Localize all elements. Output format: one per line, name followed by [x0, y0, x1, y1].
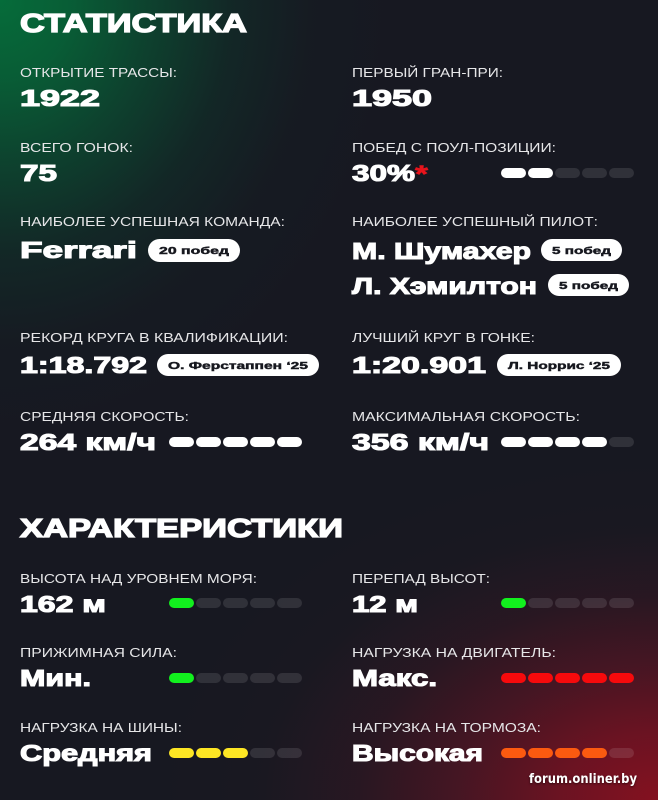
- pill: Hamilton wins: 5 побед: [559, 280, 618, 292]
- stat: wins from pole: 30%: [352, 160, 415, 186]
- characteristic: altitude: [20, 572, 302, 617]
- red asterisk: *: [415, 161, 429, 188]
- characteristic: brake load: [352, 721, 634, 766]
- characteristic: elevation change: ПЕРЕПАД ВЫСОТ:: [352, 572, 490, 586]
- characteristic: downforce: [20, 646, 302, 691]
- characteristic: tyre load: [20, 721, 302, 766]
- stat: best race lap: 1:20.901: [352, 352, 486, 378]
- stat: most successful team: Ferrari: [20, 237, 137, 263]
- heading: characteristics: ХАРАКТЕРИСТИКИ: [20, 513, 343, 543]
- characteristic: brake load: Высокая: [352, 740, 483, 766]
- stat: total races: [20, 141, 133, 186]
- stat: top speed: 356 км/ч: [352, 429, 489, 455]
- pill: Hamilton wins: [548, 274, 629, 296]
- characteristic: engine load: [352, 646, 634, 691]
- stat: most successful driver: НАИБОЛЕЕ УСПЕШНЫЙ ПИЛОТ:: [352, 214, 598, 229]
- characteristic: engine load: Макс.: [352, 665, 437, 691]
- pill: Verstappen: О. Ферстаппен ‘25: [168, 360, 308, 372]
- stat: qualifying lap record: РЕКОРД КРУГА В КВАЛИФИКАЦИИ:: [20, 331, 288, 345]
- stat: most successful driver: [352, 214, 629, 299]
- characteristic: downforce: ПРИЖИМНАЯ СИЛА:: [20, 646, 177, 660]
- characteristic: downforce: Мин.: [20, 665, 91, 691]
- stat: total races: 75: [20, 160, 57, 186]
- characteristic: elevation change: 12 м: [352, 591, 418, 617]
- gauge: orange 4 of 5: [501, 748, 634, 758]
- stat: track opening: [20, 66, 177, 111]
- stat: total races: ВСЕГО ГОНОК:: [20, 141, 133, 155]
- stat: first grand prix: ПЕРВЫЙ ГРАН-ПРИ:: [352, 65, 503, 80]
- heading: statistics: СТАТИСТИКА: [20, 8, 247, 38]
- stat: most successful team: [20, 215, 285, 263]
- stat: wins from pole: ПОБЕД С ПОУЛ-ПОЗИЦИИ:: [352, 141, 556, 155]
- watermark: forum.onliner.by: [529, 772, 637, 787]
- stat: track opening: 1922: [20, 85, 100, 111]
- characteristic: brake load: НАГРУЗКА НА ТОРМОЗА:: [352, 721, 541, 735]
- gauge: green 1 of 5: [169, 598, 302, 608]
- pill: Norris: Л. Норрис ‘25: [508, 360, 610, 372]
- pill: Schumacher wins: 5 побед: [552, 245, 611, 257]
- stat: first grand prix: 1950: [352, 85, 432, 111]
- stat: top speed: МАКСИМАЛЬНАЯ СКОРОСТЬ:: [352, 410, 580, 424]
- stat: most successful team: НАИБОЛЕЕ УСПЕШНАЯ КОМАНДА:: [20, 215, 285, 229]
- pill: Schumacher wins: [541, 239, 622, 261]
- characteristic: altitude: ВЫСОТА НАД УРОВНЕМ МОРЯ:: [20, 572, 257, 586]
- gauge: green 1 of 5: [501, 598, 634, 608]
- stat: most successful driver: М. Шумахер: [352, 238, 531, 264]
- stat: qualifying lap record: [20, 331, 319, 378]
- gauge: 4 of 5: [501, 437, 634, 447]
- gauge: green 1 of 5: [169, 673, 302, 683]
- stat: average speed: СРЕДНЯЯ СКОРОСТЬ:: [20, 410, 189, 424]
- pill: Verstappen: [157, 354, 319, 376]
- stat: top speed: [352, 410, 634, 455]
- stat: track opening: ОТКРЫТИЕ ТРАССЫ:: [20, 66, 177, 80]
- stat: best race lap: [352, 330, 621, 378]
- pill: 20 wins: [148, 239, 240, 262]
- stat: first grand prix: [352, 65, 503, 111]
- stat: qualifying lap record: 1:18.792: [20, 352, 147, 378]
- characteristic: elevation change: [352, 572, 634, 617]
- stat: wins from pole: [352, 141, 634, 188]
- stat: best race lap: ЛУЧШИЙ КРУГ В ГОНКЕ:: [352, 330, 535, 345]
- gauge: yellow 3 of 5: [169, 748, 302, 758]
- characteristic: tyre load: Средняя: [20, 740, 152, 766]
- stat: most successful driver: Л. Хэмилтон: [352, 273, 537, 299]
- gauge: red 5 of 5: [501, 673, 634, 683]
- stat: average speed: [20, 410, 302, 455]
- pill: 20 wins: 20 побед: [159, 245, 230, 257]
- stat: average speed: 264 км/ч: [20, 429, 156, 455]
- characteristic: altitude: 162 м: [20, 591, 106, 617]
- pill: Norris: [497, 354, 621, 376]
- characteristic: tyre load: НАГРУЗКА НА ШИНЫ:: [20, 721, 182, 735]
- characteristic: engine load: НАГРУЗКА НА ДВИГАТЕЛЬ:: [352, 646, 556, 660]
- gauge: 2 of 5: [501, 168, 634, 178]
- gauge: 5 of 5: [169, 437, 302, 447]
